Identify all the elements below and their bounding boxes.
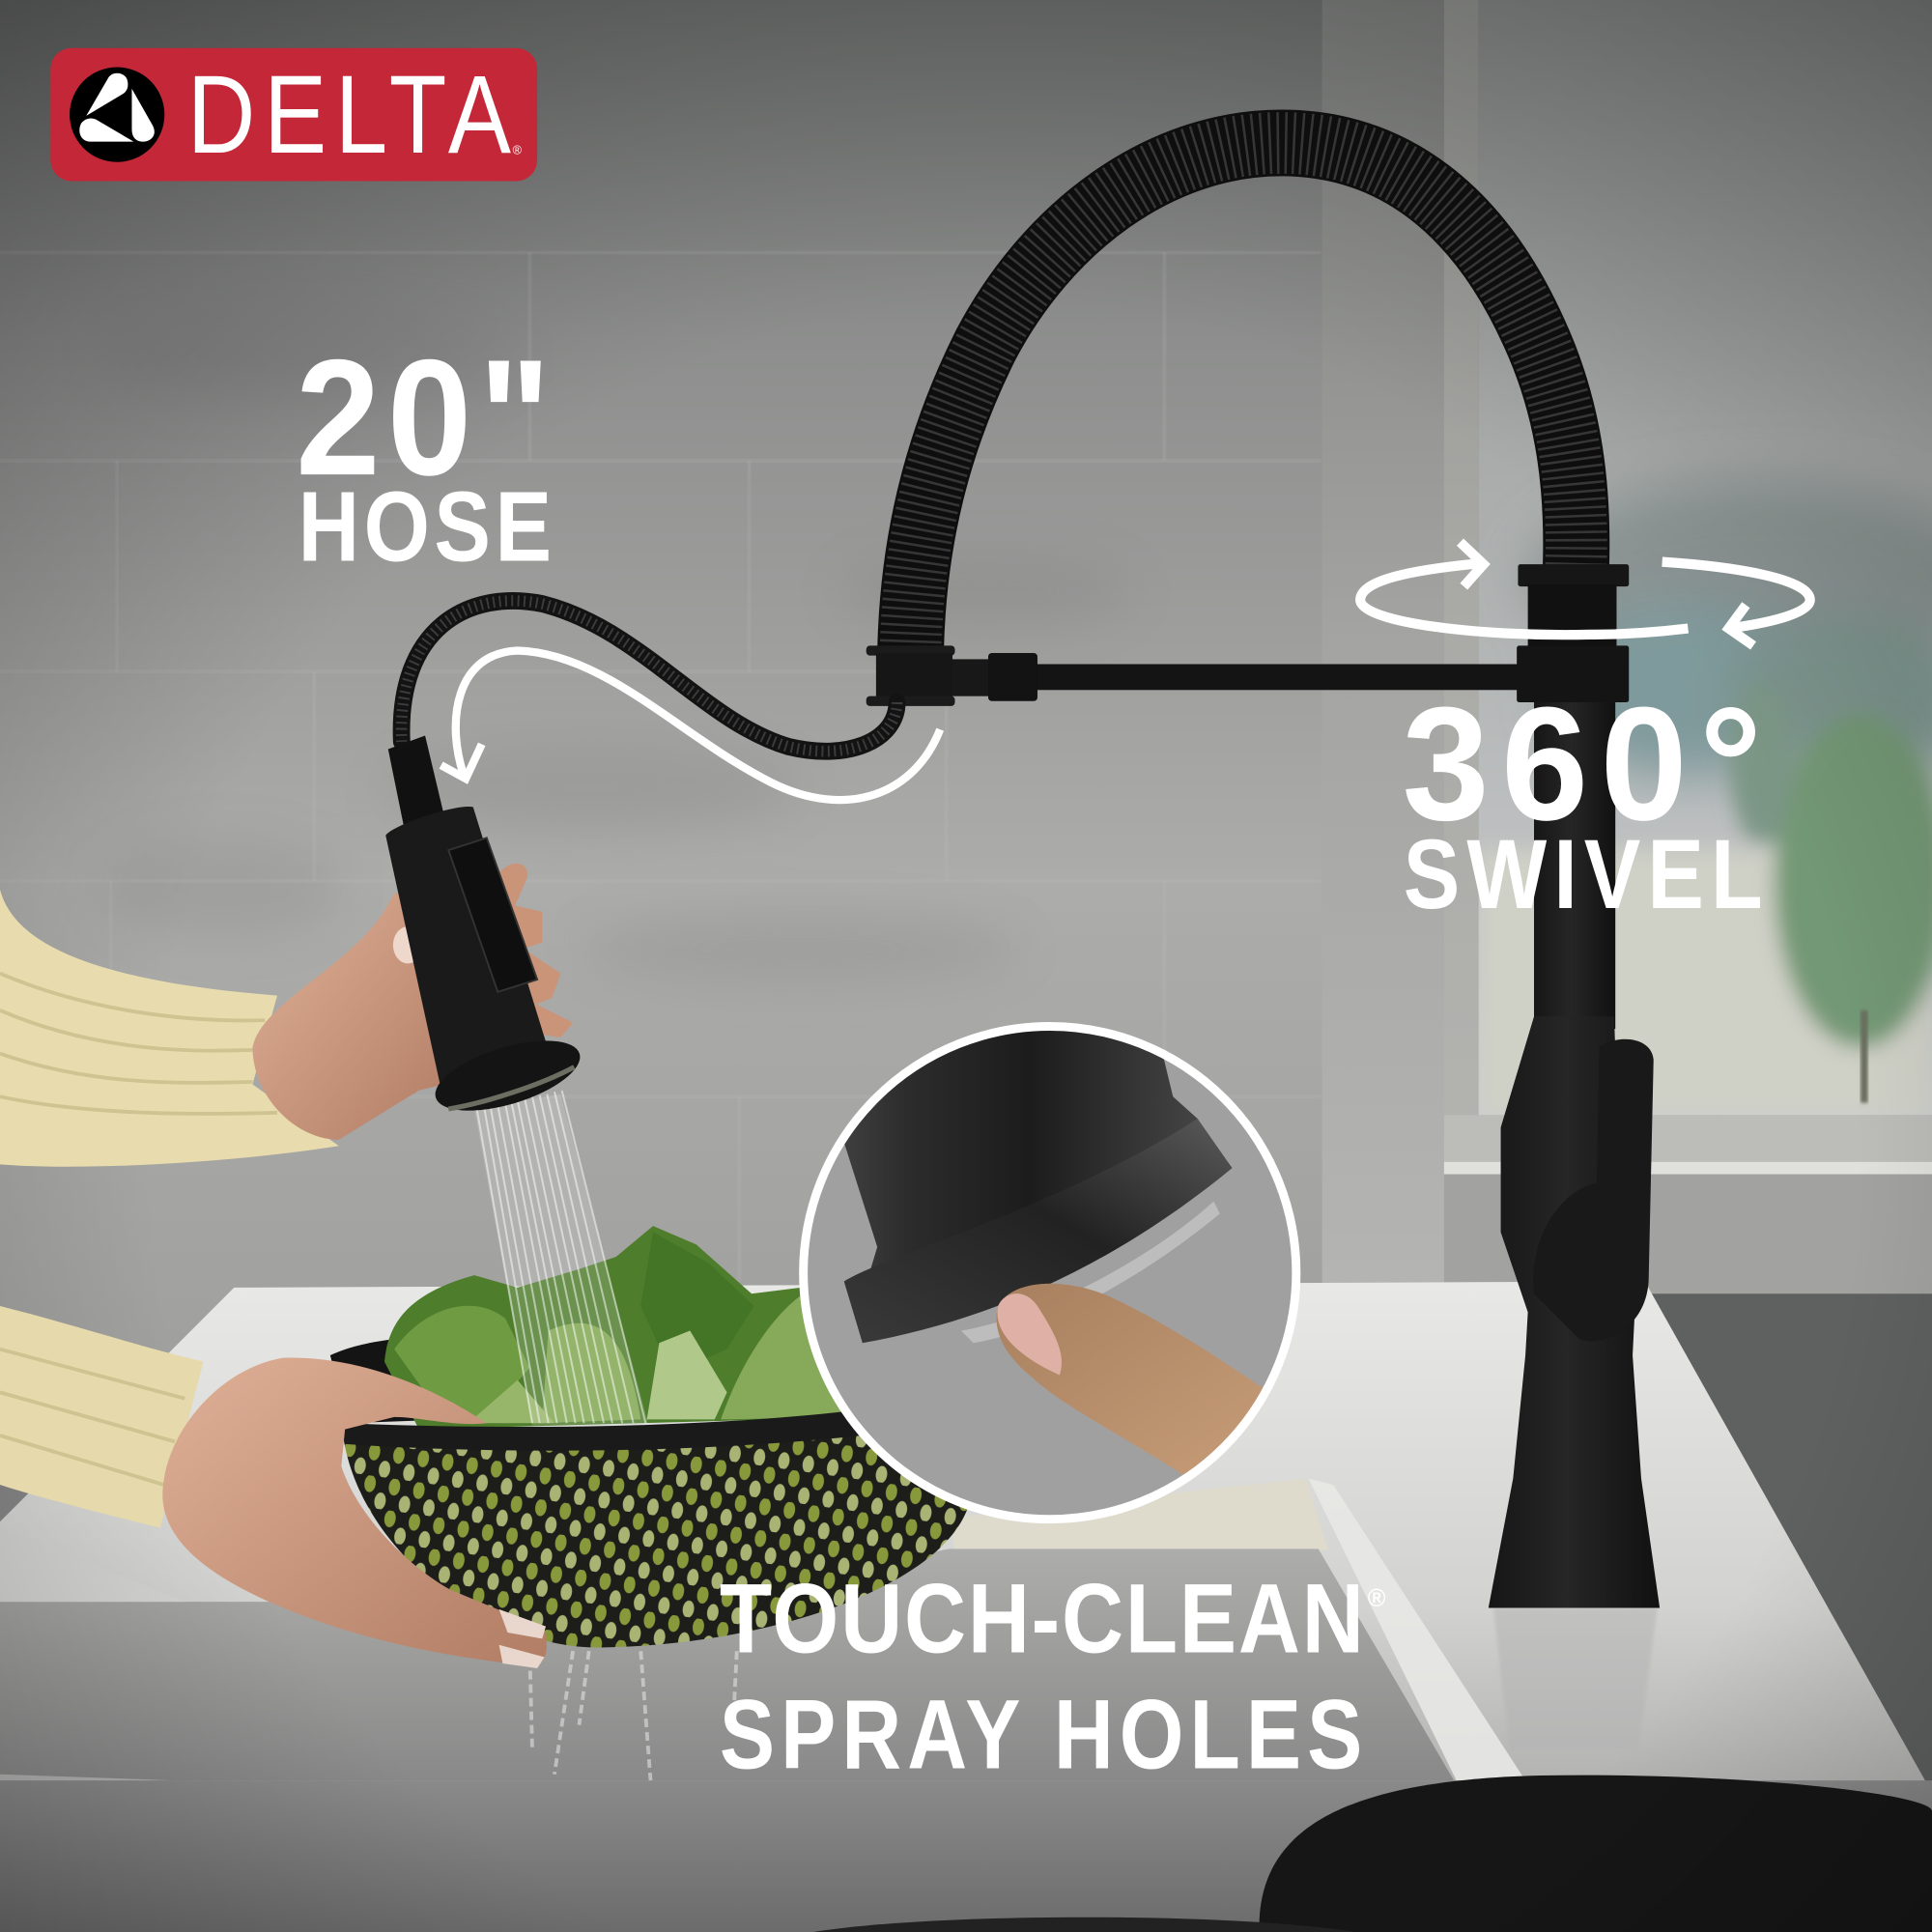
water drips under bowl: [529, 1651, 737, 1780]
faucet: spout arm and joint: [867, 645, 1525, 706]
background: wall column beside window: [1322, 0, 1479, 1288]
inset circle: touch-clean spray head close-up: [804, 985, 1296, 1520]
background: marble wall: [0, 0, 1932, 1355]
bowl: rear rim: [330, 1328, 518, 1423]
swivel rotation arrows: [1360, 542, 1810, 645]
background: blurred window landscape: [1479, 0, 1932, 1115]
callout: 360 degree swivel: SWIVEL: [1404, 820, 1763, 930]
callout: 20 inch hose: HOSE: [298, 471, 552, 582]
faucet: corrugated gooseneck hose: [911, 143, 1577, 650]
inset: finger: [997, 1284, 1269, 1479]
hand holding sprayer: [252, 864, 573, 1140]
callout: Touch-Clean spray holes: TOUCH-CLEAN: [720, 1564, 1364, 1674]
bowl: perforated mesh: [343, 1410, 967, 1647]
lettuce in bowl: [384, 1226, 863, 1430]
logo: wordmark: DELTA: [187, 53, 511, 177]
faucet: swivel collar, stem, body and handle: [1489, 564, 1660, 1608]
inset: spray head flange: [844, 1119, 1233, 1343]
inset: spray head body: [844, 1031, 1198, 1268]
inset: spray holes: [961, 1202, 1220, 1343]
water spray from head: [474, 1091, 648, 1426]
callout: 360 degree swivel: 360°: [1403, 673, 1762, 854]
hand holding bowl: [162, 1357, 547, 1668]
background: window frame, sill and lower wall: [1322, 0, 1932, 1786]
sleeve: upper arm: [0, 890, 339, 1167]
callout: Touch-Clean spray holes: SPRAY HOLES: [720, 1679, 1362, 1789]
callout: 20 inch hose: 20": [296, 325, 551, 509]
sleeve: lower arm: [0, 1306, 203, 1528]
background: countertop: [0, 1282, 1932, 1932]
background: pan in foreground: [813, 1776, 1932, 1932]
callout: Touch-Clean spray holes: ®: [1368, 1585, 1386, 1612]
logo: Delta red badge: [50, 48, 537, 181]
background: sink ledge and basin: [0, 1479, 1932, 1932]
callout: Touch-Clean spray holes: [720, 1564, 1386, 1789]
logo: registered mark: ®: [513, 142, 523, 156]
logo: black circle with white petals: [70, 68, 164, 162]
pull-down braided hose: [402, 601, 897, 752]
faucet: counter reflection: [1493, 1608, 1658, 1749]
pull-down sprayer: neck, body, button and head: [385, 735, 587, 1124]
white arrow along hose: [441, 650, 940, 800]
